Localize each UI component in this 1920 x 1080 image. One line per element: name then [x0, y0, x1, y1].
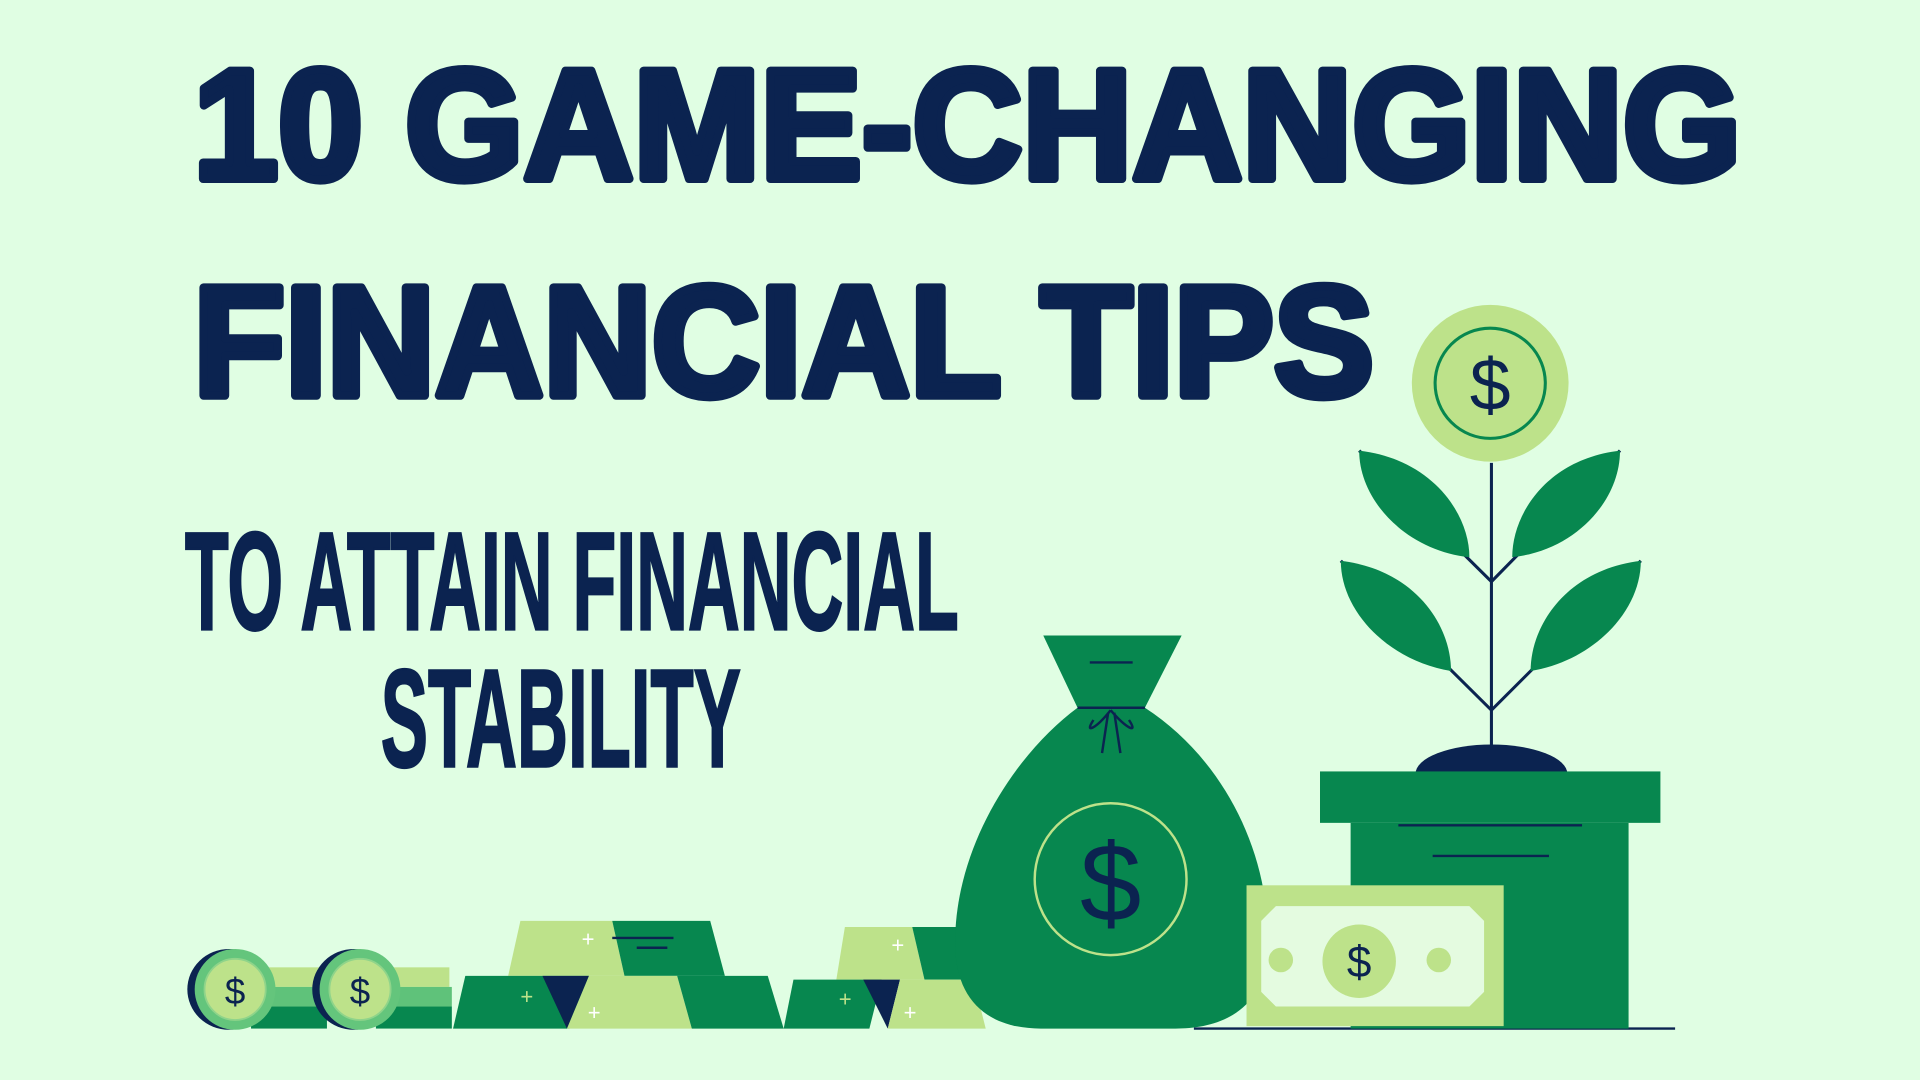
- title: [193, 38, 1741, 430]
- icon: coin stacks: [187, 949, 452, 1030]
- icon: gold bars right: [784, 927, 986, 1029]
- title: FINANCIAL TIPS: [193, 255, 1374, 430]
- icon: gold bars right: +: [904, 1000, 917, 1025]
- icon: gold bars right: +: [839, 987, 852, 1012]
- icon: money bag: [955, 636, 1268, 1029]
- title: 10 GAME-CHANGING: [193, 38, 1741, 213]
- icon: gold bars left: [453, 921, 784, 1029]
- icon: gold bars left: +: [520, 984, 533, 1009]
- subtitle: STABILITY: [381, 641, 741, 797]
- icon: dollar bill: $: [1347, 938, 1371, 987]
- icon: dollar bill: [1247, 885, 1504, 1026]
- ground line: [1194, 1028, 1675, 1030]
- icon: plant with coin: $: [1470, 343, 1511, 426]
- icon: plant pot: [1320, 744, 1660, 1029]
- icon: coin stacks: $: [225, 971, 245, 1012]
- icon: plant with coin: [1341, 305, 1641, 747]
- icon: gold bars left: +: [588, 1000, 601, 1025]
- subtitle: [185, 503, 959, 797]
- subtitle: TO ATTAIN FINANCIAL: [185, 503, 959, 659]
- icon: gold bars right: +: [891, 933, 904, 958]
- icon: gold bars left: +: [582, 927, 595, 952]
- icon: money bag: $: [1080, 822, 1141, 945]
- icon: coin stacks: $: [350, 971, 370, 1012]
